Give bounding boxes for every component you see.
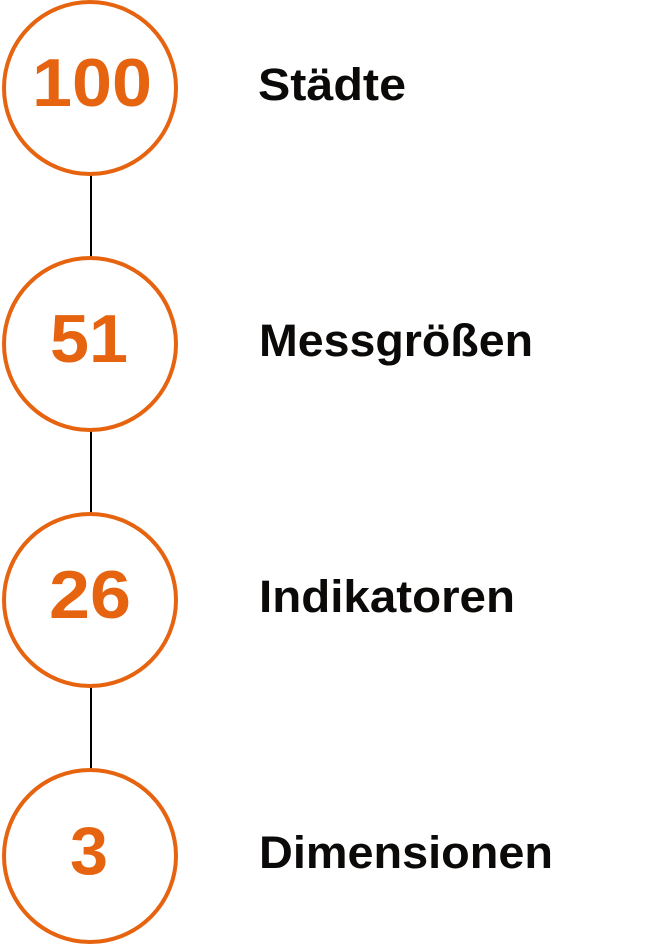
number: 100: 100 bbox=[32, 45, 152, 121]
step: 26 Indikatoren bbox=[4, 514, 515, 686]
label: Indikatoren: Indikatoren bbox=[259, 571, 515, 622]
step: 100 Städte bbox=[4, 2, 406, 174]
connector: 26 to 3 bbox=[90, 687, 92, 770]
label: Städte: Städte bbox=[258, 59, 406, 110]
circle: 100 bbox=[4, 2, 176, 174]
step: 51 Messgrößen bbox=[4, 258, 533, 430]
circle: 3 bbox=[4, 770, 176, 942]
connector: 100 to 51 bbox=[90, 175, 92, 258]
number: 3: 3 bbox=[70, 813, 108, 889]
number: 26: 26 bbox=[49, 557, 131, 633]
label: Dimensionen: Dimensionen bbox=[259, 827, 553, 878]
circle: 51 bbox=[4, 258, 176, 430]
circle: 26 bbox=[4, 514, 176, 686]
label: Messgrößen: Messgrößen bbox=[259, 315, 533, 366]
number: 51: 51 bbox=[50, 301, 128, 377]
connector: 51 to 26 bbox=[90, 431, 92, 514]
step: 3 Dimensionen bbox=[4, 770, 553, 942]
